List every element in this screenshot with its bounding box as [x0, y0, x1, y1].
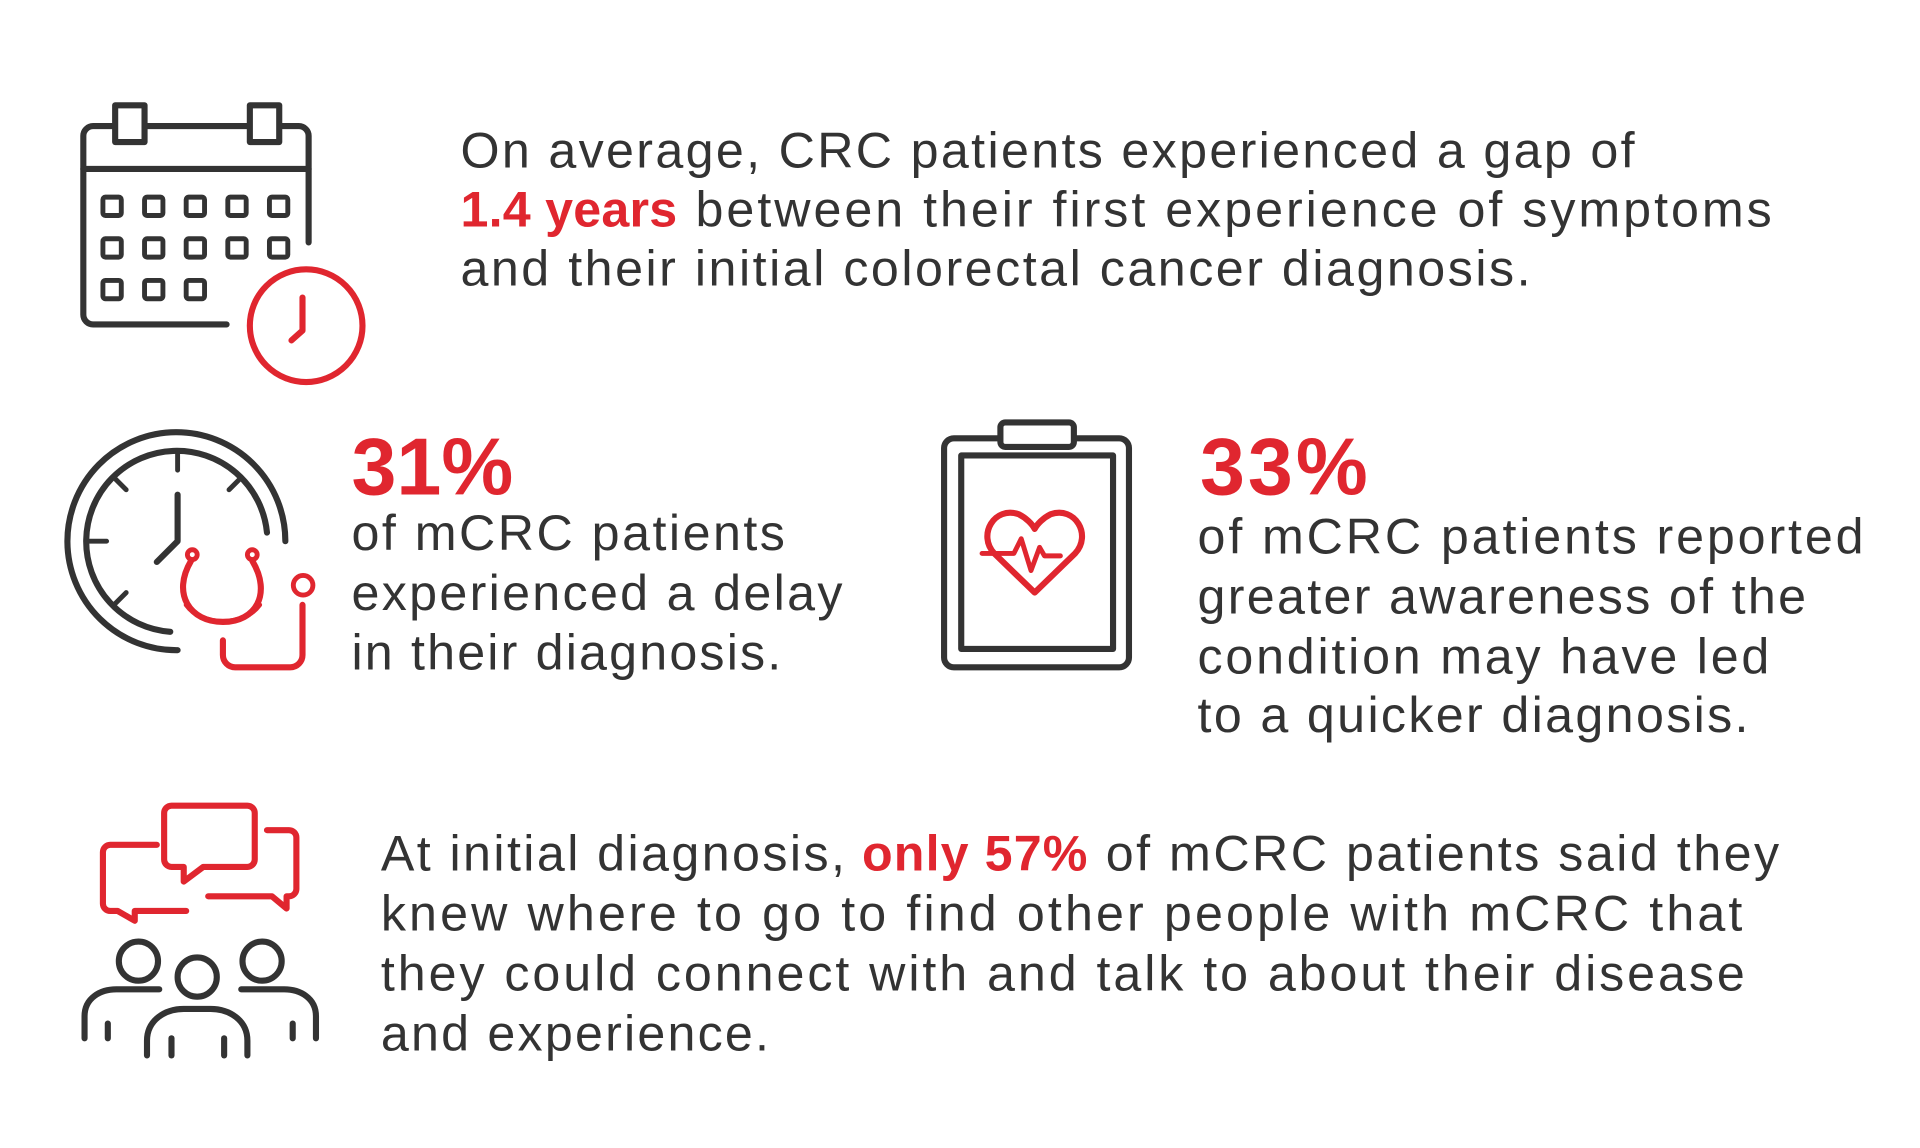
text: gap of 1.4 years: [460, 123, 1772, 296]
text: 31%: of mCRC patients: [351, 505, 785, 561]
text: 33%: condition may have led: [1198, 628, 1769, 684]
text: 31%: experienced a delay: [351, 565, 842, 621]
text: only 57%: At initial diagnosis,: [381, 826, 845, 882]
text: 31%: [351, 423, 842, 681]
text: 31%: 31%: [351, 423, 513, 513]
text: only 57%: they could connect with and talk to about their disease: [381, 946, 1745, 1002]
text: gap of 1.4 years: 1.4 years: [460, 182, 677, 238]
text: 33%: 33%: [1200, 423, 1368, 513]
text: only 57%: and experience.: [381, 1006, 769, 1062]
text: 33%: [1198, 423, 1864, 743]
icon: chat bubbles and people: [85, 806, 316, 1055]
text: only 57%: of mCRC patients said they: [1106, 826, 1779, 882]
text: 33%: of mCRC patients reported: [1198, 508, 1864, 564]
text: 33%: to a quicker diagnosis.: [1198, 687, 1749, 743]
text: only 57%: only 57%: [862, 826, 1087, 882]
icon: clock with stethoscope: [67, 432, 313, 667]
text: 31%: in their diagnosis.: [351, 625, 781, 681]
text: only 57%: knew where to go to find other people with mCRC that: [381, 886, 1742, 942]
text: only 57%: [381, 826, 1779, 1062]
icon: clipboard with heart: [944, 422, 1129, 667]
text: gap of 1.4 years: On average, CRC patients experienced a gap of: [460, 123, 1636, 179]
text: gap of 1.4 years: and their initial colorectal cancer diagnosis.: [460, 240, 1531, 296]
text: 33%: greater awareness of the: [1198, 568, 1806, 624]
text: gap of 1.4 years: between their first experience of symptoms: [696, 182, 1772, 238]
icon: calendar with clock: [83, 105, 362, 382]
